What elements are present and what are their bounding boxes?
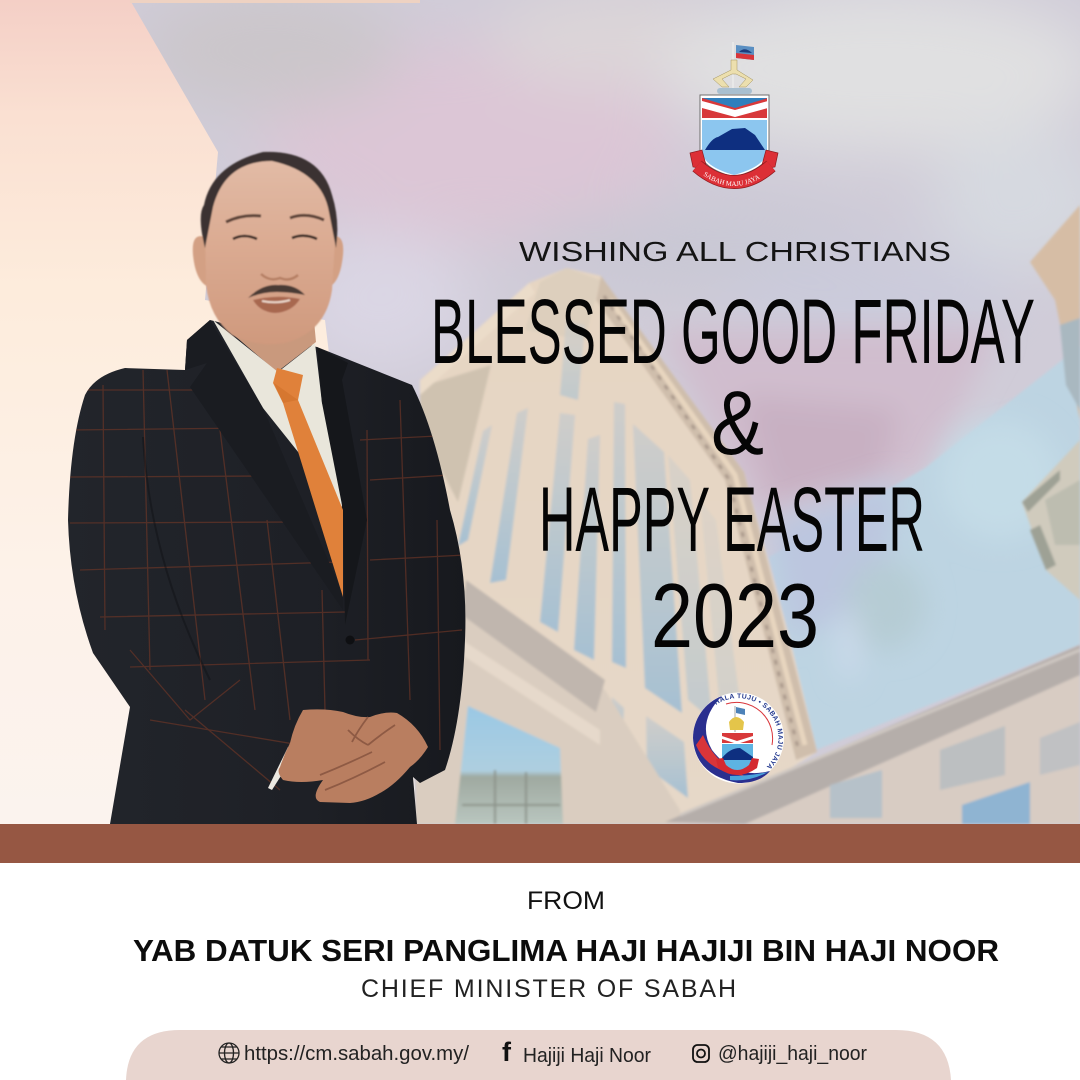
- head: [193, 152, 343, 344]
- neck: [228, 300, 316, 372]
- minister role: CHIEF MINISTER OF SABAH: [361, 975, 736, 1003]
- brown band: [0, 824, 1080, 863]
- tower windows: [458, 320, 745, 824]
- heading: wishing all Christians: WISHING ALL CHRISTIANS: [519, 236, 951, 267]
- peach left panel: [0, 0, 416, 824]
- logo: Hala Tuju Sabah Maju Jaya: [693, 692, 784, 784]
- hands: [279, 709, 428, 803]
- tie: [273, 368, 343, 597]
- shirt: [213, 320, 342, 507]
- photo of man: [68, 152, 465, 824]
- lips: [253, 297, 300, 313]
- shirt cuff: [268, 747, 296, 790]
- hair: [201, 152, 337, 248]
- icon: globe: [219, 1043, 239, 1063]
- tower right edge: [596, 276, 817, 760]
- instagram handle: @hajiji_haji_noor: [718, 1043, 867, 1065]
- icon: instagram: [693, 1045, 709, 1062]
- ampersand: &: [711, 373, 764, 474]
- contact bar: [126, 1030, 951, 1080]
- logo: Hala Tuju Sabah Maju Jaya: HALA TUJU • SABAH MAJU JAYA: [714, 694, 783, 768]
- background scene: [0, 0, 1080, 824]
- podium window: [455, 706, 563, 824]
- right tower: [1030, 205, 1080, 420]
- ears: [193, 236, 343, 288]
- shield: [700, 95, 769, 177]
- flag: [732, 42, 734, 92]
- jacket check pattern: [70, 370, 465, 790]
- jacket button: [346, 636, 354, 644]
- face: [205, 158, 336, 344]
- nose: [261, 274, 298, 279]
- mustache: [248, 285, 305, 298]
- from label: FROM: [527, 887, 605, 915]
- jacket: [68, 320, 465, 824]
- icon: facebook: f: [502, 1037, 512, 1067]
- crest: Sabah coat of arms: [690, 42, 778, 189]
- eyebrows: [226, 215, 324, 222]
- podium: [415, 618, 680, 824]
- building: main tower: [415, 205, 1080, 824]
- ribbon: [690, 150, 706, 168]
- arms: [713, 60, 753, 87]
- lapels: [185, 320, 343, 610]
- year: 2023: [651, 566, 819, 667]
- minister name: YAB DATUK SERI PANGLIMA HAJI HAJIJI BIN HAJI NOOR: [133, 933, 999, 968]
- facebook name: Hajiji Haji Noor: [523, 1045, 651, 1067]
- sky: pink haze: [675, 332, 985, 511]
- lower right wing: [748, 676, 1080, 824]
- website: https://cm.sabah.gov.my/: [244, 1043, 469, 1065]
- sky: pale blue: [769, 346, 1080, 750]
- motto: SABAH MAJU JAYA: [704, 172, 760, 186]
- eyes: [233, 236, 317, 239]
- sleeve fold: [143, 437, 210, 680]
- cloudy sky: [140, 0, 1080, 370]
